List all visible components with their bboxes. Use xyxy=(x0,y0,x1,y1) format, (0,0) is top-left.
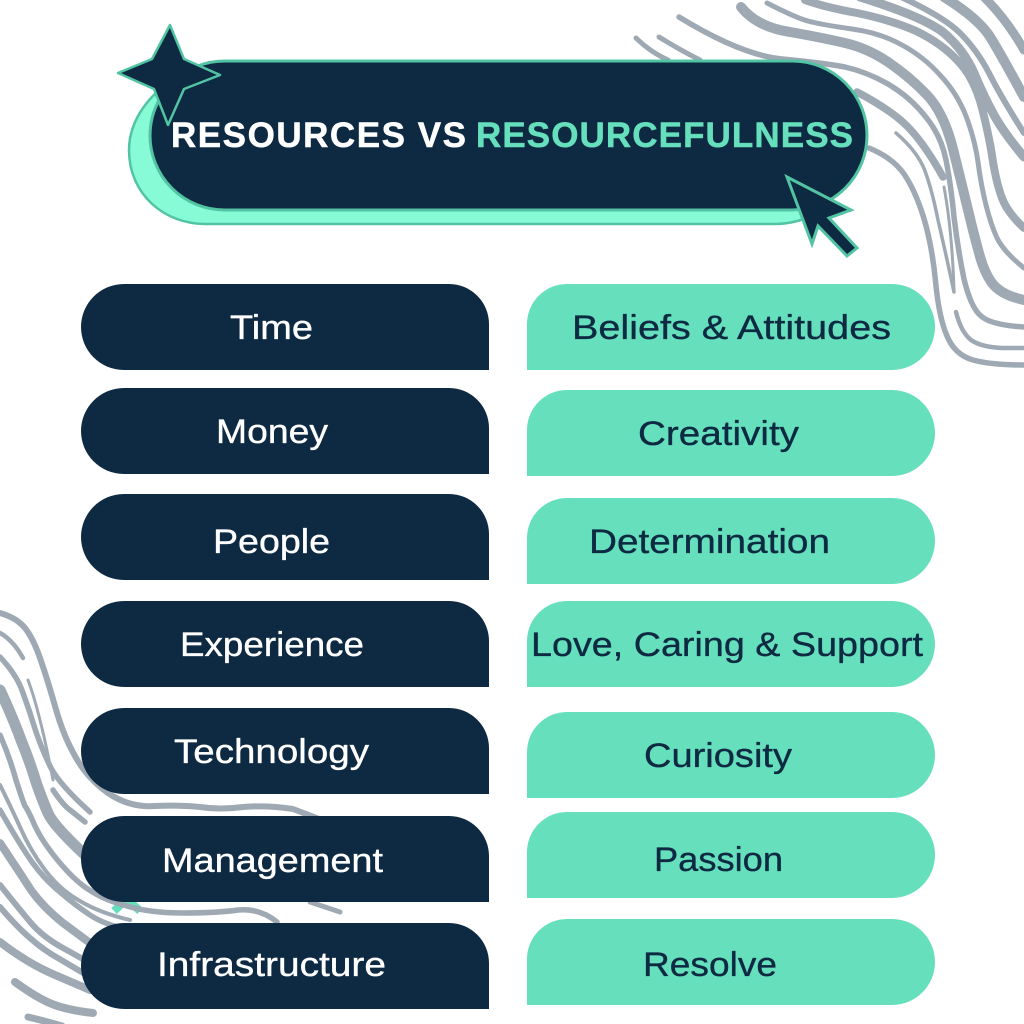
row: Time: Time xyxy=(230,309,313,347)
row: Money xyxy=(81,388,489,474)
row: Curiosity: Curiosity xyxy=(644,737,792,775)
resources column xyxy=(81,284,489,1009)
row: Determination: Determination xyxy=(589,523,830,561)
row: Love, Caring & Support: Love, Caring & Support xyxy=(531,626,924,664)
row: Infrastructure: Infrastructure xyxy=(157,946,386,984)
icon: green chevron peeking behind pills xyxy=(114,899,140,911)
row: Beliefs & Attitudes xyxy=(527,284,935,370)
resourcefulness column xyxy=(527,284,935,1005)
banner shadow shape xyxy=(129,85,820,224)
row: Experience: Experience xyxy=(180,626,364,664)
title text: RESOURCEFULNESS xyxy=(476,116,853,155)
decorative waves: top right xyxy=(636,0,1024,365)
row: Creativity: Creativity xyxy=(638,415,799,453)
icon: star xyxy=(118,25,220,125)
row: Management xyxy=(81,816,489,902)
row: Resolve xyxy=(527,919,935,1005)
row: Beliefs & Attitudes: Beliefs & Attitudes xyxy=(572,309,891,347)
row: People xyxy=(81,494,489,580)
row: People: People xyxy=(213,523,330,561)
decorative waves: bottom left xyxy=(0,613,340,1024)
row: Time xyxy=(81,284,489,370)
row: Infrastructure xyxy=(81,923,489,1009)
row: Management: Management xyxy=(162,842,384,880)
row: Passion xyxy=(527,812,935,898)
title text: RESOURCES VS xyxy=(171,116,466,155)
row: Technology: Technology xyxy=(174,733,369,771)
row: Creativity xyxy=(527,390,935,476)
row: Resolve: Resolve xyxy=(643,946,777,984)
banner pill xyxy=(150,61,867,210)
row: Money: Money xyxy=(216,413,328,451)
row: Determination xyxy=(527,498,935,584)
row: Passion: Passion xyxy=(654,841,783,879)
row: Curiosity xyxy=(527,712,935,798)
row: Love, Caring & Support xyxy=(527,601,935,687)
row: Experience xyxy=(81,601,489,687)
icon: cursor arrow xyxy=(787,177,857,256)
title banner xyxy=(118,25,867,256)
row: Technology xyxy=(81,708,489,794)
